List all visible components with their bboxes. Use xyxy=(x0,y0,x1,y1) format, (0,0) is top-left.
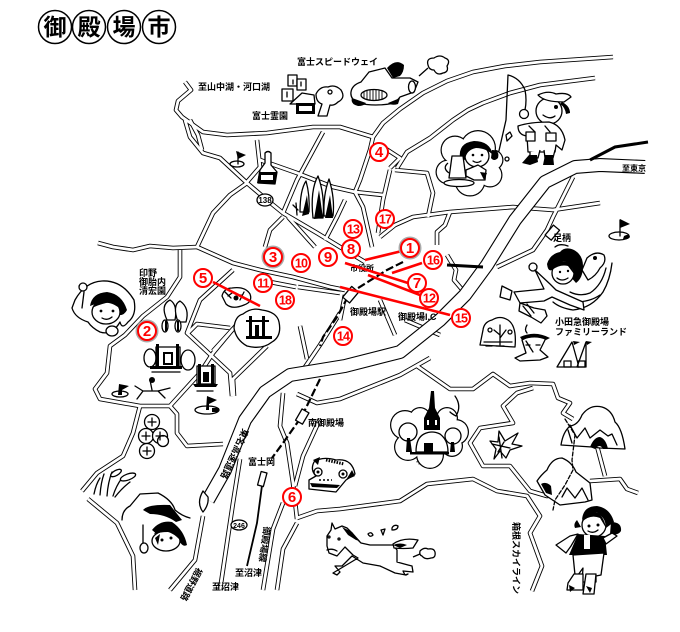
illustration: golf flag xyxy=(609,219,630,240)
numbered markers: 5 xyxy=(199,270,207,287)
map labels: 富士霊園 xyxy=(252,110,288,121)
illustration: family land tents xyxy=(557,341,592,367)
numbered markers: 15 xyxy=(455,312,468,326)
illustration: child with lantern xyxy=(72,281,135,336)
map labels: 至山中湖・河口湖 xyxy=(198,81,270,92)
map labels: 平和公園 xyxy=(416,458,440,466)
map labels: 至東京 xyxy=(622,163,646,173)
numbered markers xyxy=(138,143,470,506)
map labels xyxy=(139,56,646,603)
illustration: tree sculptures xyxy=(162,300,187,332)
map labels: 小田急御殿場 xyxy=(555,316,609,327)
numbered markers: 3 xyxy=(269,249,277,266)
illustration: pampas grass xyxy=(94,468,137,497)
illustration: horse xyxy=(327,523,418,575)
map labels: 南御殿場 xyxy=(308,417,344,428)
map labels: 足柄 xyxy=(553,232,571,243)
numbered markers: 4 xyxy=(375,144,384,161)
expressway: Tomei xyxy=(200,165,647,512)
map labels: 清宏園 xyxy=(139,285,166,296)
numbered markers: 11 xyxy=(257,276,270,290)
map labels: 東名高速道路 xyxy=(218,427,251,481)
numbered markers: 17 xyxy=(379,212,392,226)
illustration: horse puff xyxy=(413,548,435,559)
illustration: pagoda peace park xyxy=(390,391,469,469)
title: 御殿場市: 市 xyxy=(148,14,170,40)
railway line xyxy=(247,142,648,566)
illustration: sports car xyxy=(351,62,418,106)
numbered markers: 10 xyxy=(295,256,308,270)
map labels: 印野 xyxy=(139,267,157,278)
map labels: 裾野道路 xyxy=(178,566,205,603)
route markers: 246 xyxy=(233,523,245,530)
numbered markers: 9 xyxy=(324,249,332,266)
numbered markers: 13 xyxy=(347,222,360,236)
map labels: 御殿場I.C xyxy=(398,311,437,322)
map labels: 御殿場駅 xyxy=(350,306,386,317)
illustration: exhaust puff xyxy=(419,56,449,76)
illustration: sheep xyxy=(222,288,251,307)
numbered markers: 18 xyxy=(279,294,292,308)
numbered markers: 8 xyxy=(347,241,355,258)
numbered markers: 14 xyxy=(337,330,350,344)
map labels: 御殿場線 xyxy=(257,526,273,563)
route markers xyxy=(231,194,273,530)
illustration: girl with tea in cloud xyxy=(436,130,504,196)
illustration: lion-dance head xyxy=(309,457,355,492)
illustration: bottle xyxy=(257,152,277,184)
illustration: mountains with tunnel xyxy=(537,406,625,510)
illustration: cherry blossoms xyxy=(138,414,168,458)
illustration: shrine hall in trees xyxy=(144,344,195,372)
numbered markers: 6 xyxy=(288,489,296,506)
illustration: small tree patch xyxy=(480,318,515,347)
title: 御殿場市: 殿 xyxy=(78,14,100,40)
map labels: 箱根スカイライン xyxy=(511,522,522,594)
title: 御殿場市: 場 xyxy=(112,14,136,40)
title: 御殿場市: 御 xyxy=(44,14,66,40)
numbered markers: 7 xyxy=(413,275,421,292)
numbered markers: 12 xyxy=(423,292,436,306)
map labels: ファミリーランド xyxy=(555,327,627,337)
map labels: 富士スピードウェイ xyxy=(297,56,378,67)
illustration: central castle in cloud xyxy=(234,309,280,347)
map labels: 御胎内 xyxy=(139,276,166,287)
map labels: 至沼津 xyxy=(212,581,239,592)
numbered markers: 2 xyxy=(143,323,151,340)
illustration: fisherman xyxy=(498,75,571,165)
illustration: face with hat xyxy=(515,325,550,361)
illustration: golf flag west xyxy=(230,151,246,167)
illustration: maple leaf xyxy=(490,431,522,459)
illustration: golf flag and rider xyxy=(112,377,170,399)
route markers: 138 xyxy=(258,196,272,205)
illustration: poplar trees xyxy=(293,176,334,219)
leader lines xyxy=(213,251,450,315)
illustration: girl waving xyxy=(556,506,621,594)
numbered markers: 16 xyxy=(427,254,440,268)
illustration: golf flag south xyxy=(195,396,219,414)
illustration: Ashigara kid with dog xyxy=(500,245,612,323)
title: 御殿場市 xyxy=(38,10,176,44)
illustration: second shrine hall xyxy=(193,364,218,391)
map labels: 市役所 xyxy=(350,263,374,273)
illustration: Fuji Reien buildings xyxy=(282,75,343,116)
numbered markers: 1 xyxy=(406,240,414,257)
map labels: 富士岡 xyxy=(248,456,275,467)
map labels: 至沼津 xyxy=(235,567,262,578)
illustration: person with dark hair and cliff xyxy=(122,493,190,553)
road network xyxy=(82,57,638,591)
